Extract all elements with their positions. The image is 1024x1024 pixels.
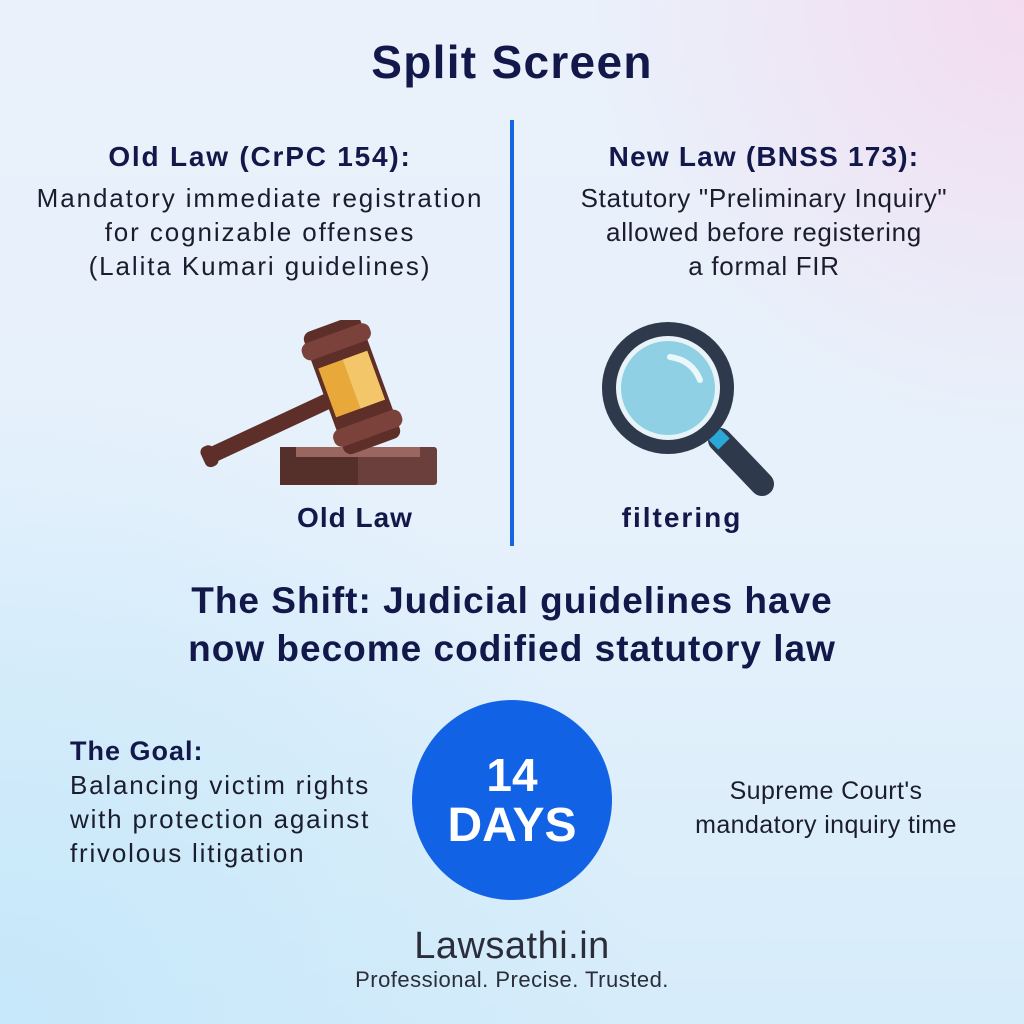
text: old law description: for cognizable offenses xyxy=(105,217,415,247)
text: goal description: frivolous litigation xyxy=(70,838,305,868)
panel: old law xyxy=(37,141,483,281)
text: supreme court: Supreme Court's xyxy=(730,777,922,805)
text: new law description: a formal FIR xyxy=(688,251,840,281)
text: goal description: Balancing victim rights xyxy=(70,770,370,800)
circle: 14 days: DAYS xyxy=(448,799,576,852)
shift statement xyxy=(188,580,836,669)
footer: tagline: Professional. Precise. Trusted. xyxy=(355,967,669,992)
text: new law description: allowed before registering xyxy=(606,217,922,247)
block: the goal xyxy=(70,736,370,868)
heading: new law: New Law (BNSS 173): xyxy=(609,141,919,172)
icon: magnifying glass xyxy=(602,322,774,496)
shift statement: now become codified statutory law xyxy=(188,628,836,669)
heading: old law: Old Law (CrPC 154): xyxy=(108,141,412,172)
text: old law description xyxy=(37,183,483,281)
heading: the goal: The Goal: xyxy=(70,736,204,766)
text: supreme court: mandatory inquiry time xyxy=(695,811,957,839)
text: old law description: Mandatory immediate registration xyxy=(37,183,483,213)
circle: 14 days xyxy=(412,700,612,900)
text: supreme court xyxy=(695,777,957,839)
text: old law description: (Lalita Kumari guidelines) xyxy=(89,251,431,281)
label: old law: Old Law xyxy=(297,502,413,533)
panel: new law xyxy=(581,141,947,281)
title: Split Screen xyxy=(371,36,653,88)
label: filtering: filtering xyxy=(622,502,742,533)
text: new law description xyxy=(581,183,947,281)
circle: 14 days: 14 xyxy=(486,749,538,801)
text: new law description: Statutory "Preliminary Inquiry" xyxy=(581,183,947,213)
divider xyxy=(510,120,514,546)
icon: gavel xyxy=(200,320,437,485)
shift statement: The Shift: Judicial guidelines have xyxy=(191,580,833,621)
text: goal description xyxy=(70,770,370,868)
footer: brand: Lawsathi.in xyxy=(414,925,610,967)
text: goal description: with protection against xyxy=(70,804,370,834)
